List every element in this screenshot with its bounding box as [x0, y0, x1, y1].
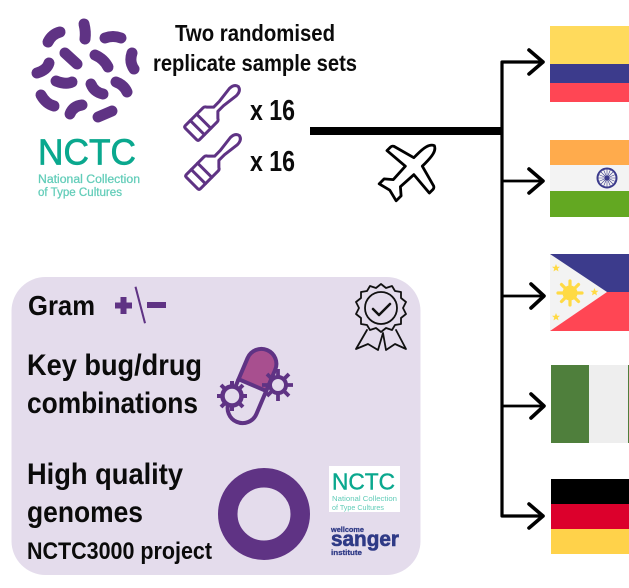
icon: vial two [185, 129, 246, 190]
logo: NCTC bacteria cluster [37, 24, 134, 117]
label: high quality genomes: genomes [27, 496, 143, 529]
logo: small NCTC [329, 466, 400, 512]
icon: drug capsule with gears [217, 344, 293, 428]
logo: Wellcome Sanger Institute: wellcome [330, 527, 364, 534]
flag: Nigeria [551, 365, 629, 443]
chart: genome ring [228, 478, 300, 550]
logo: Wellcome Sanger Institute: institute [331, 548, 362, 557]
label: x 16 first set: x 16 [250, 95, 295, 127]
logo: Wellcome Sanger Institute: sanger [331, 528, 399, 551]
heading: replicate sample sets: replicate sample sets [153, 50, 357, 76]
logo: NCTC wordmark: of Type Cultures [38, 187, 122, 199]
logo: NCTC wordmark [38, 132, 140, 199]
label: key bug/drug combinations: combinations [27, 387, 198, 420]
label: x 16 second set: x 16 [250, 146, 295, 178]
label: Gram: Gram [28, 290, 95, 321]
icon: aeroplane [366, 124, 456, 214]
label: high quality genomes: NCTC3000 project [27, 538, 212, 565]
label: high quality genomes: High quality [27, 458, 183, 491]
logo: NCTC wordmark: NCTC [38, 132, 136, 172]
icon: gram plus and minus [115, 286, 166, 324]
logo: small NCTC: National Collection [332, 496, 397, 503]
heading: replicate sample sets [153, 20, 357, 76]
flag: India [550, 140, 629, 217]
panel: selection criteria [12, 277, 420, 575]
icon: quality rosette [356, 284, 406, 350]
logo: small NCTC: of Type Cultures [332, 505, 385, 512]
flag: Germany [551, 479, 629, 554]
flag: Colombia [550, 26, 629, 102]
label: high quality genomes [27, 458, 212, 565]
label: key bug/drug combinations [27, 349, 202, 420]
heading: replicate sample sets: Two randomised [175, 20, 335, 46]
logo: NCTC wordmark: National Collection [38, 174, 140, 186]
flag: Philippines [550, 254, 629, 331]
logo: small NCTC: NCTC [332, 468, 395, 494]
shipping line and branching arrows [310, 50, 544, 528]
label: key bug/drug combinations: Key bug/drug [27, 349, 202, 382]
icon: vial one [184, 80, 245, 141]
